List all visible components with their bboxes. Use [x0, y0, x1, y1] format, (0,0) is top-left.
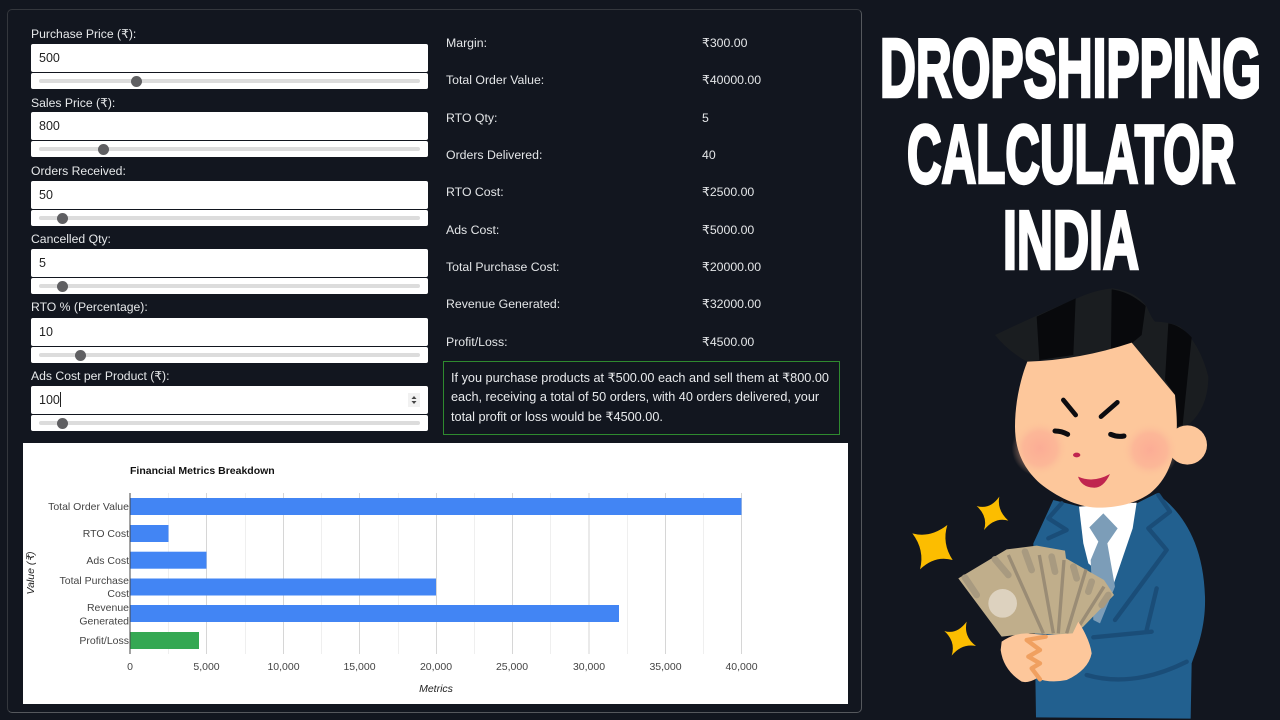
results list: Margin:: [446, 36, 487, 50]
input group: sales price: 800: [39, 119, 60, 133]
input group: purchase price: Purchase Price (₹):: [31, 27, 136, 41]
input group: ads cost per product: 100: [39, 393, 60, 407]
results list: [446, 36, 761, 349]
callout: summary: If you purchase products at ₹500.00 each and sell them at ₹800.00: [451, 371, 829, 385]
bar chart: financial metrics breakdown: [23, 443, 848, 704]
callout: summary: total profit or loss would be ₹4500.00.: [451, 410, 663, 424]
chart title: Financial Metrics Breakdown: [130, 465, 275, 477]
x axis labels: 30,000: [573, 661, 605, 673]
sparkles: [912, 497, 1008, 656]
panel: calculator: [7, 9, 862, 713]
hands: [1001, 622, 1092, 682]
banknotes: [958, 546, 1114, 637]
input group: rto percentage: RTO % (Percentage):: [31, 300, 148, 314]
results list: ₹4500.00: [702, 335, 754, 349]
face: [1012, 343, 1207, 508]
illustration: businessman holding cash: [912, 290, 1207, 719]
category labels: RTO Cost: [83, 528, 129, 540]
input group: orders received: [31, 164, 428, 226]
results list: ₹20000.00: [702, 260, 761, 274]
bars: [130, 498, 742, 649]
x axis labels: 0: [127, 661, 133, 673]
input group: purchase price: [31, 27, 428, 89]
input group: sales price: [31, 96, 428, 157]
results list: RTO Qty:: [446, 111, 497, 125]
callout: summary: [443, 361, 840, 435]
suit: [1033, 493, 1205, 719]
x axis labels: 20,000: [420, 661, 452, 673]
input group: cancelled qty: [31, 232, 428, 294]
input group: cancelled qty: 5: [39, 256, 46, 270]
x axis labels: 10,000: [267, 661, 300, 673]
input group: ads cost per product: [31, 369, 428, 431]
x axis labels: 35,000: [649, 661, 682, 673]
results list: Ads Cost:: [446, 223, 499, 237]
y axis title: Value (₹): [25, 551, 37, 595]
results list: ₹5000.00: [702, 223, 754, 237]
callout: summary: each, receiving a total of 50 orders, with 40 orders delivered, your: [451, 390, 819, 404]
x axis labels: 25,000: [496, 661, 528, 673]
input group: rto percentage: [31, 300, 428, 363]
results list: 5: [702, 111, 709, 125]
input group: cancelled qty: Cancelled Qty:: [31, 232, 111, 246]
category labels: Generated: [79, 616, 129, 628]
input group: orders received: Orders Received:: [31, 164, 126, 178]
title: [880, 22, 1261, 282]
category labels: Profit/Loss: [79, 635, 129, 647]
results list: ₹2500.00: [702, 185, 754, 199]
results list: Total Purchase Cost:: [446, 260, 559, 274]
x axis title: Metrics: [419, 683, 454, 695]
x axis labels: 40,000: [725, 661, 758, 673]
results list: Total Order Value:: [446, 73, 544, 87]
category labels: Total Purchase: [60, 575, 129, 587]
input group: ads cost per product: Ads Cost per Product (₹):: [31, 369, 169, 383]
category labels: Cost: [107, 588, 129, 600]
category labels: Ads Cost: [86, 555, 129, 567]
results list: ₹32000.00: [702, 297, 761, 311]
input group: rto percentage: 10: [39, 325, 53, 339]
x axis labels: [127, 661, 758, 673]
results list: ₹300.00: [702, 36, 747, 50]
input group: purchase price: 500: [39, 51, 60, 65]
hair: [995, 288, 1208, 428]
results list: RTO Cost:: [446, 185, 504, 199]
category labels: Total Order Value: [48, 501, 129, 513]
results list: ₹40000.00: [702, 73, 761, 87]
results list: 40: [702, 148, 716, 162]
x axis labels: 15,000: [343, 661, 376, 673]
results list: Orders Delivered:: [446, 148, 542, 162]
input group: orders received: 50: [39, 188, 53, 202]
category labels: Revenue: [87, 602, 129, 614]
x axis labels: 5,000: [193, 661, 220, 673]
results list: Revenue Generated:: [446, 297, 560, 311]
input group: sales price: Sales Price (₹):: [31, 96, 115, 110]
category labels: [48, 501, 129, 647]
results list: Profit/Loss:: [446, 335, 508, 349]
